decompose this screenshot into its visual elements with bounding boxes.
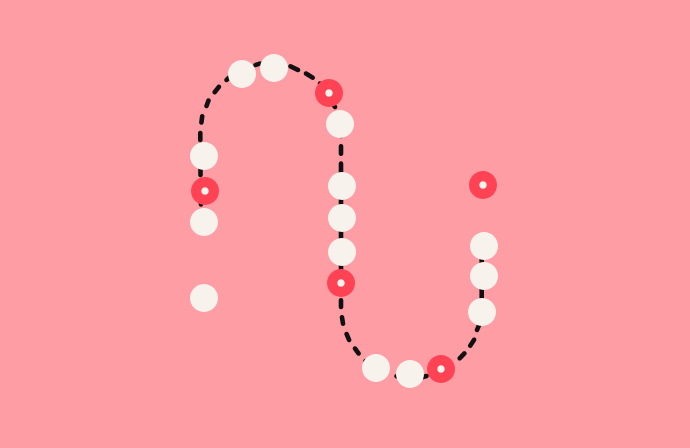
marker: cream dot 1 <box>228 60 256 88</box>
marker: red ring top <box>315 79 343 107</box>
marker: cream dot 3 <box>326 110 354 138</box>
marker: cream dot 8 <box>328 204 356 232</box>
marker: red ring left <box>191 177 219 205</box>
marker: cream dot 13 <box>470 262 498 290</box>
dashed route line <box>200 64 482 377</box>
marker: cream dot 4 <box>190 142 218 170</box>
marker: red ring right <box>469 171 497 199</box>
marker: cream dot 5 <box>190 208 218 236</box>
marker: cream dot 2 <box>260 54 288 82</box>
marker: cream dot 14 <box>468 298 496 326</box>
marker: cream dot 10 <box>362 354 390 382</box>
marker: cream dot 12 <box>470 232 498 260</box>
marker: red ring centre <box>327 269 355 297</box>
marker: red ring bottom <box>427 355 455 383</box>
marker: cream dot 11 <box>396 360 424 388</box>
marker: cream dot 6 <box>190 284 218 312</box>
marker: cream dot 7 <box>328 172 356 200</box>
marker: cream dot 9 <box>328 238 356 266</box>
